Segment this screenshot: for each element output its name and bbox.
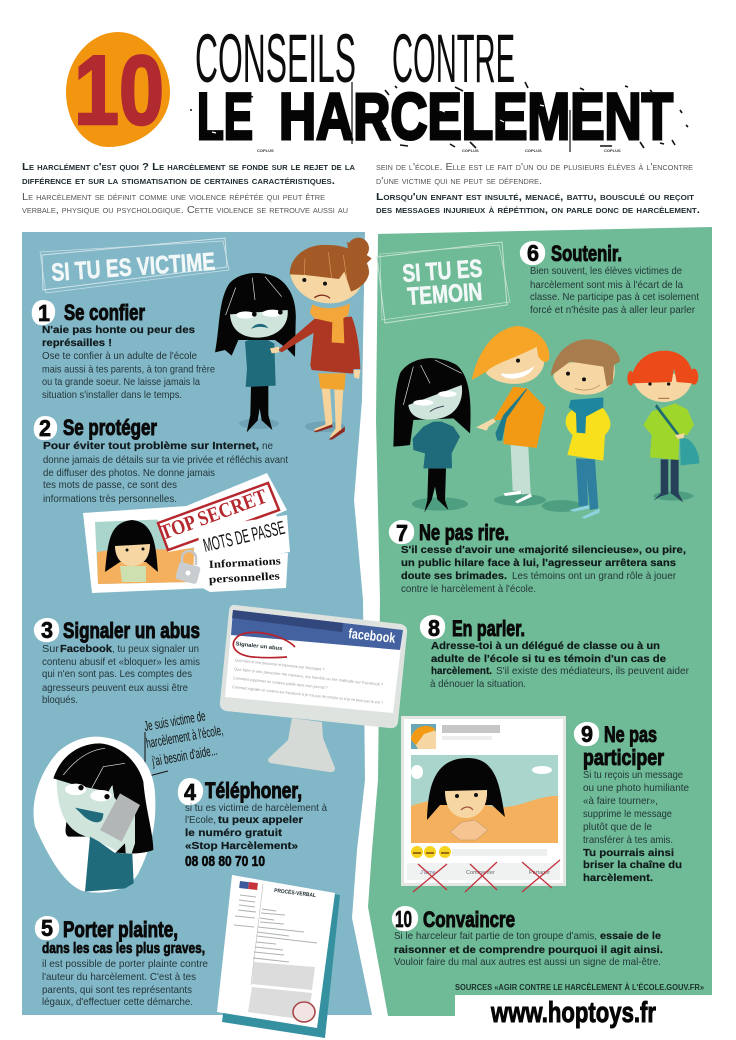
- step 5: porter plainte: il est possible de porter plainte contre: [42, 958, 208, 970]
- step 3: signaler un abus: 3: [41, 617, 53, 643]
- girl with red hair: [627, 351, 699, 503]
- step 3: signaler un abus: , tu peux signaler un: [112, 643, 199, 655]
- step 3: signaler un abus: contenu abusif et «bloquer» les amis: [42, 656, 200, 668]
- illustration: private photo with top secret stamp: personnelles: [209, 570, 281, 586]
- title: [190, 20, 688, 153]
- step 1: se confier: situation s'installer dans le temps.: [42, 389, 182, 401]
- step 4: telephoner: 08 08 80 70 10: [185, 853, 265, 870]
- heading frame: si tu es temoin: SI TU ES: [401, 254, 483, 288]
- step 2: se proteger: Pour éviter tout problème sur Internet,: [43, 440, 259, 452]
- illustration: computer monitor with facebook page: Signaler un abus: [235, 641, 283, 652]
- illustration: proces-verbal document: PROCÈS-VERBAL: [274, 886, 317, 899]
- step 4: telephoner: [178, 778, 327, 870]
- speech text: harcèlement à l'école,: [145, 722, 224, 751]
- girl with black hair: [393, 358, 471, 513]
- intro text: right column: des messages injurieux à répétition, on parle donc de harcèlement.: [376, 204, 700, 216]
- step 3: signaler un abus: agresseurs peuvent eux aussi être: [42, 682, 188, 694]
- illustration: computer monitor with facebook page: Quoi faire si une personne m'importune par messages ?: [235, 657, 325, 672]
- step 1: se confier: représailles !: [42, 337, 112, 349]
- step 2: se proteger: 2: [39, 415, 51, 441]
- panel: si tu es victime background: [22, 232, 372, 1015]
- illustration: victim and adult: [215, 238, 372, 439]
- step 8: en parler: à dénouer la situation.: [430, 678, 526, 690]
- step 3: signaler un abus: qui n'en sont pas. Les comptes des: [42, 668, 192, 680]
- title: COPLUS: [525, 148, 542, 153]
- step 8: en parler: harcèlement.: [431, 665, 492, 677]
- step 9: ne pas participer: «à faire tourner»,: [583, 795, 658, 807]
- step 1: se confier: 1: [38, 300, 50, 326]
- step 10: convaincre: Si le harceleur fait partie de ton groupe d'amis,: [394, 930, 597, 942]
- step 1: se confier: N'aie pas honte ou peur des: [42, 324, 195, 336]
- step 5: porter plainte: Porter plainte,: [63, 917, 178, 942]
- speech text: j'ai besoin d'aide...: [150, 742, 219, 769]
- step 7: ne pas rire: contre le harcèlement à l'école.: [401, 583, 536, 595]
- step 9: ne pas participer: plutôt que de le: [583, 821, 652, 833]
- step 2: se proteger: tes mots de passe, ce sont des: [43, 479, 177, 491]
- boy with orange hair: [472, 326, 549, 503]
- intro text: left column: différence et sur la stigmatisation de certaines caractéristiques.: [22, 175, 335, 187]
- sources: SOURCES «AGIR CONTRE LE HARCÈLEMENT À L'ÉCOLE.GOUV.FR»: [455, 983, 705, 992]
- step 10: convaincre: Convaincre: [423, 907, 515, 932]
- step 3: signaler un abus: [34, 617, 200, 706]
- step 2: se proteger: ne: [262, 440, 273, 452]
- step 9: ne pas participer: Ne pas: [604, 722, 657, 747]
- illustration: group of four children: [393, 326, 699, 519]
- illustration: computer monitor with facebook page: Comment signaler un contenu sur Facebook si je n'ai pas de compte ou si je ne peux pas le voir ?: [232, 684, 384, 705]
- heading frame: si tu es temoin: TEMOIN: [406, 278, 483, 311]
- boy with brown hair: [551, 339, 620, 519]
- step 7: ne pas rire: [389, 520, 686, 595]
- step 4: telephoner: tu peux appeler: [218, 814, 303, 826]
- step 3: signaler un abus: bloqués.: [42, 694, 78, 706]
- step 8: en parler: adulte de l'école si tu es témoin d'un cas de: [431, 653, 666, 665]
- illustration: computer monitor with facebook page: facebook: [348, 625, 396, 646]
- step 10: convaincre: Vouloir faire du mal aux autres est aussi un signe de mal-être.: [394, 956, 661, 968]
- intro text: left column: [22, 161, 355, 216]
- step 3: signaler un abus: Facebook: [60, 643, 112, 655]
- step 5: porter plainte: dans les cas les plus graves,: [42, 940, 205, 957]
- step 9: ne pas participer: supprime le message: [583, 808, 672, 820]
- step 4: telephoner: 4: [184, 779, 196, 805]
- step 2: se proteger: donne jamais de détails sur ta vie privée et réfléchis avant: [43, 454, 288, 466]
- step 6: soutenir: Bien souvent, les élèves victimes de: [530, 265, 682, 277]
- speech text: [143, 707, 224, 777]
- intro text: right column: sein de l'école. Elle est le fait d'un ou de plusieurs élèves à l'encontre: [376, 161, 693, 173]
- step 2: se proteger: Se protéger: [63, 415, 157, 440]
- illustration: facebook post with crossed actions: Commenter: [466, 870, 495, 876]
- step 1: se confier: mais aussi à tes parents, à ton grand frère: [42, 364, 215, 376]
- step 6: soutenir: Soutenir.: [551, 241, 622, 266]
- step 4: telephoner: «Stop Harcèlement»: [185, 840, 298, 852]
- step 7: ne pas rire: S'il cesse d'avoir une «majorité silencieuse», ou pire,: [401, 544, 686, 556]
- step 7: ne pas rire: un public hilare face à lui, l'agresseur arrêtera sans: [401, 557, 676, 569]
- illustration: private photo with top secret stamp: MOTS DE PASSE: [201, 518, 287, 557]
- step 5: porter plainte: légaux, d'effectuer cette démarche.: [42, 996, 193, 1008]
- illustration: private photo with top secret stamp: TOP SECRET: [157, 484, 270, 545]
- step 3: signaler un abus: Signaler un abus: [63, 618, 200, 643]
- step 9: ne pas participer: Si tu reçois un message: [583, 769, 683, 781]
- step 6: soutenir: forcé et n'hésite pas à aller leur parler: [530, 304, 695, 316]
- illustration: computer monitor with facebook page: [220, 605, 407, 772]
- step 9: ne pas participer: briser la chaîne du: [583, 859, 682, 871]
- title: COPLUS: [604, 148, 621, 153]
- step 9: ne pas participer: 9: [581, 721, 593, 747]
- step 3: signaler un abus: Sur: [42, 643, 60, 655]
- step 7: ne pas rire: doute ses brimades.: [401, 570, 507, 582]
- step 4: telephoner: Téléphoner,: [205, 778, 302, 803]
- illustration: facebook post with crossed actions: Partager: [529, 870, 550, 876]
- step 4: telephoner: l'Ecole,: [185, 814, 216, 826]
- illustration: private photo with top secret stamp: Informations: [209, 555, 282, 571]
- intro text: left column: Le harclément c'est quoi ? Le harcèlement se fonde sur le rejet de la: [22, 161, 355, 173]
- title: CONSEILS: [195, 20, 356, 97]
- step 5: porter plainte: parents, qui sont tes représentants: [42, 984, 192, 996]
- step 4: telephoner: le numéro gratuit: [185, 827, 283, 839]
- step 1: se confier: Ose te confier à un adulte de l'école: [42, 350, 197, 362]
- intro text: right column: d'une victime qui ne peut se défendre.: [376, 175, 542, 187]
- step 1: se confier: Se confier: [64, 300, 145, 325]
- illustration: computer monitor with facebook page: Que faire si une personne me menace, me harcèle ou me maltraite sur Facebook ?: [234, 666, 384, 687]
- step 8: en parler: [420, 615, 689, 690]
- step 8: en parler: En parler.: [452, 616, 525, 641]
- intro text: left column: Le harcèlement se définit comme une violence répétée qui peut être: [22, 191, 325, 203]
- intro text: right column: Lorsqu'un enfant est insulté, menacé, battu, bousculé ou reçoit: [376, 191, 695, 203]
- title: LE: [197, 79, 253, 153]
- intro text: right column: [376, 161, 700, 216]
- title: COPLUS: [257, 148, 274, 153]
- step 5: porter plainte: 5: [41, 915, 53, 941]
- step 9: ne pas participer: [574, 721, 689, 884]
- intro text: left column: verbale, physique ou psychologique. Cette violence se retrouve aussi au: [22, 204, 348, 216]
- step 6: soutenir: [520, 240, 699, 316]
- step 5: porter plainte: l'auteur du harcèlement. C'est à tes: [42, 971, 196, 983]
- illustration: proces-verbal document: [217, 875, 340, 1038]
- step 1: se confier: ou ta grande soeur. Ne laisse jamais la: [42, 376, 200, 388]
- step 2: se proteger: informations très personnelles.: [43, 493, 177, 505]
- step 10: convaincre: 10: [395, 906, 412, 932]
- step 7: ne pas rire: Ne pas rire.: [419, 520, 509, 545]
- step 5: porter plainte: [35, 915, 208, 1008]
- illustration: private photo with top secret stamp: [83, 473, 290, 593]
- heading frame: si tu es victime: SI TU ES VICTIME: [50, 248, 216, 287]
- heading frame: si tu es victime: [40, 238, 229, 293]
- step 7: ne pas rire: Les témoins ont un grand rôle à jouer: [512, 570, 676, 582]
- step 6: soutenir: classe. Ne participe pas à cet isolement: [530, 291, 699, 303]
- step 10: convaincre: raisonner et de comprendre pourquoi il agit ainsi.: [394, 944, 663, 956]
- badge: 10: 10: [74, 35, 164, 145]
- heading frame: si tu es temoin: [377, 242, 510, 323]
- step 7: ne pas rire: 7: [396, 520, 408, 546]
- step 10: convaincre: [392, 906, 663, 968]
- step 9: ne pas participer: transférer à tes amis.: [583, 834, 673, 846]
- step 6: soutenir: harcèlement sont mis à l'écart de la: [530, 279, 683, 291]
- step 8: en parler: Adresse-toi à un délégué de classe ou à un: [431, 640, 660, 652]
- title: CONTRE: [392, 20, 515, 97]
- title: COPLUS: [462, 148, 479, 153]
- step 9: ne pas participer: ou une photo humiliante: [583, 782, 689, 794]
- speech text: Je suis victime de: [143, 707, 207, 734]
- step 2: se proteger: [34, 415, 288, 505]
- step 9: ne pas participer: harcèlement.: [583, 872, 653, 884]
- illustration: facebook post with crossed actions: [401, 716, 566, 892]
- step 9: ne pas participer: participer: [583, 745, 664, 770]
- step 1: se confier: [32, 300, 215, 401]
- step 10: convaincre: essaie de le: [600, 930, 661, 942]
- website url: www.hoptoys.fr: [490, 997, 656, 1029]
- step 2: se proteger: de diffuser des photos. Ne donne jamais: [43, 467, 215, 479]
- step 4: telephoner: si tu es victime de harcèlement à: [185, 802, 327, 814]
- step 9: ne pas participer: Tu pourrais ainsi: [583, 847, 674, 859]
- illustration: girl on the phone: [34, 737, 155, 893]
- panel: si tu es temoin background: [368, 227, 712, 1016]
- illustration: facebook post with crossed actions: J'aime: [420, 870, 436, 876]
- step 8: en parler: S'il existe des médiateurs, ils peuvent aider: [496, 665, 689, 677]
- step 8: en parler: 8: [428, 615, 440, 641]
- step 6: soutenir: 6: [527, 240, 539, 266]
- illustration: computer monitor with facebook page: Comment supprimer un contenu publié dans mon journal ?: [233, 675, 328, 690]
